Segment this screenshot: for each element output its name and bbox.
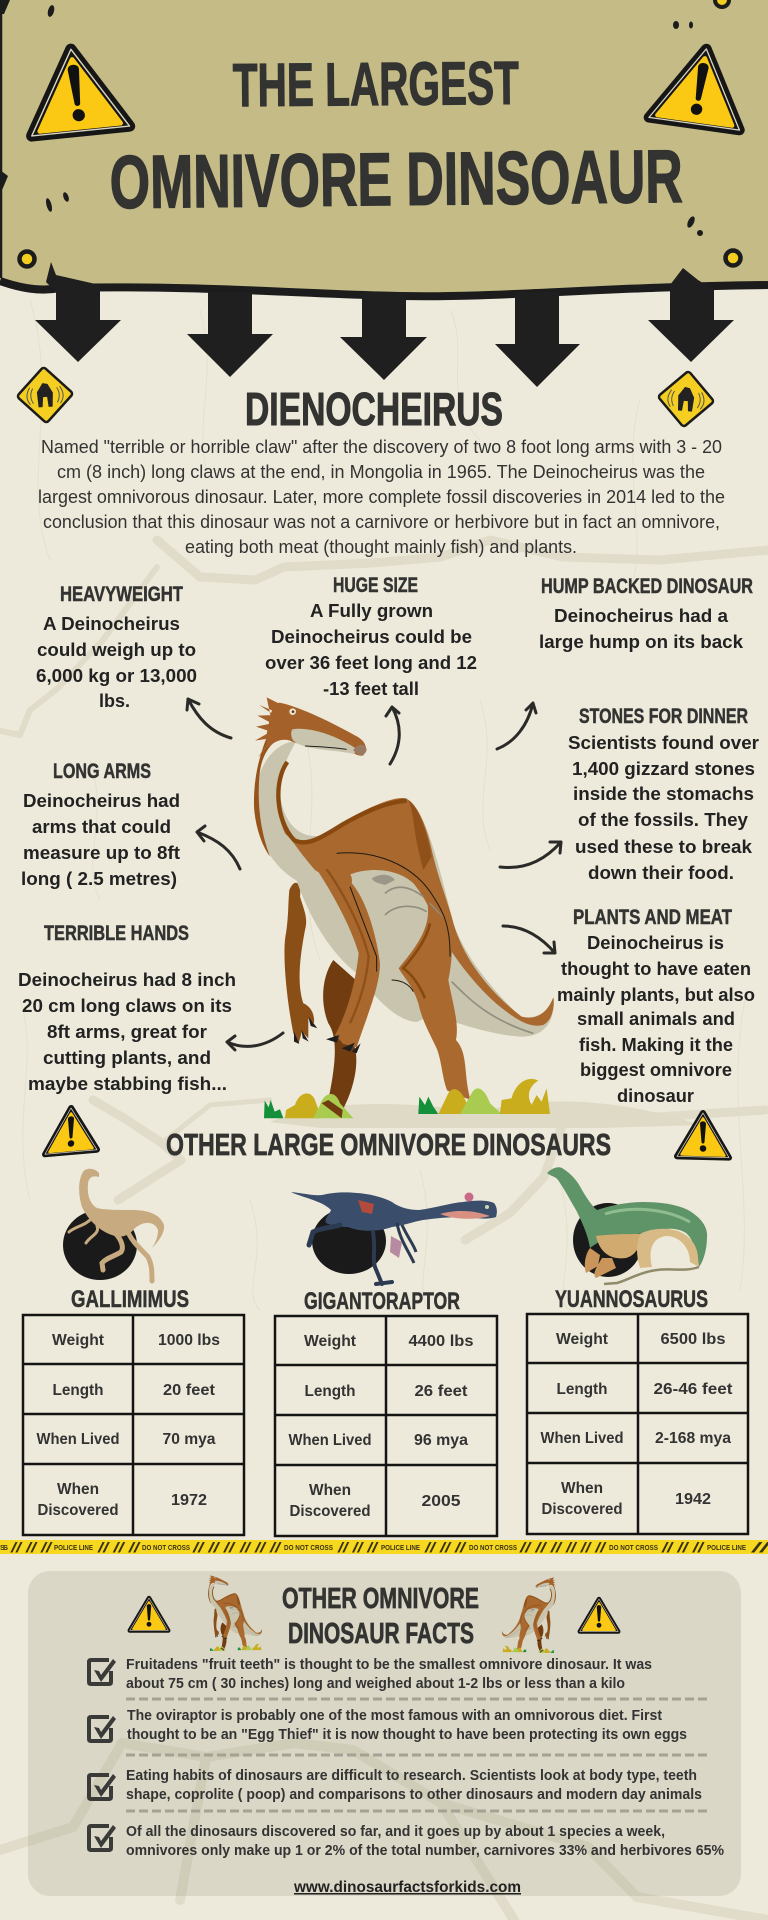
fact: heavyweight <box>36 583 197 711</box>
fact 1: about 75 cm ( 30 inches) long and weighed about 1-2 lbs or less than a kilo <box>126 1676 625 1692</box>
fact 2 <box>89 1708 687 1743</box>
table: Yuannosaurus: 1942 <box>675 1491 711 1508</box>
heading: other large omnivore dinosaurs: OTHER LARGE OMNIVORE DINOSAURS <box>166 1127 611 1162</box>
table: Gallimimus: 20 feet <box>163 1382 216 1399</box>
table: Gallimimus: When <box>57 1481 99 1498</box>
table: Yuannosaurus: 26-46 feet <box>654 1381 733 1398</box>
illustration: Gigantoraptor <box>291 1192 497 1284</box>
caution tape: POLICE LINE <box>381 1543 420 1552</box>
icon: warning triangle section right <box>677 1112 729 1158</box>
fact: terrible hands: 8ft arms, great for <box>47 1022 207 1042</box>
icon: warning triangle facts right <box>580 1599 618 1632</box>
table: Yuannosaurus: 2-168 mya <box>655 1430 731 1447</box>
table: Gigantoraptor: 26 feet <box>414 1383 468 1400</box>
table: Gallimimus: 70 mya <box>162 1431 216 1448</box>
fact: plants and meat: fish. Making it the <box>579 1035 733 1055</box>
caution tape: POLICE LINE <box>54 1543 93 1552</box>
panel: other omnivore dinosaur facts <box>28 1571 741 1896</box>
fact: stones for dinner: used these to break <box>575 837 753 857</box>
icon: warning triangle right <box>649 43 752 130</box>
fact 3: shape, coprolite ( poop) and comparisons to other dinosaurs and modern day animals <box>126 1787 702 1803</box>
caution tape: // // // <box>192 1539 237 1555</box>
illustration: Yuannosaurus <box>547 1167 707 1284</box>
table: Gigantoraptor: 4400 lbs <box>408 1333 474 1350</box>
caution tape: DO NOT CROSS <box>284 1543 333 1552</box>
fact: heavyweight: could weigh up to <box>37 640 196 660</box>
fact: terrible hands: cutting plants, and <box>43 1048 211 1068</box>
caution tape: // // // <box>10 1539 54 1555</box>
table: Gigantoraptor: 2005 <box>422 1493 461 1510</box>
fact: heavyweight: A Deinocheirus <box>43 614 180 634</box>
fact: plants and meat: small animals and <box>577 1009 735 1029</box>
illustration: Gallimimus <box>63 1169 164 1281</box>
caution tape: DO NOT CROSS <box>142 1543 190 1552</box>
caution tape: // // // <box>239 1539 283 1555</box>
table: Gallimimus: Length <box>52 1382 104 1399</box>
fact: heavyweight: HEAVYWEIGHT <box>60 583 183 606</box>
intro paragraph: Named "terrible or horrible claw" after the discovery of two 8 foot long arms with 3 - 20 <box>41 436 722 457</box>
intro paragraph: eating both meat (thought mainly fish) and plants. <box>185 536 577 557</box>
heading: other omnivore dinosaur facts: DINOSAUR FACTS <box>288 1618 474 1650</box>
fact 4: Of all the dinosaurs discovered so far, and it goes up by about 1 species a week, <box>126 1824 665 1840</box>
caution tape: SS <box>0 1543 8 1552</box>
fact: plants and meat: Deinocheirus is <box>587 933 724 953</box>
fact 2: The oviraptor is probably one of the most famous with an omnivorous diet. First <box>127 1708 662 1724</box>
caution tape: // // // <box>97 1539 142 1555</box>
fact 4 <box>89 1824 724 1859</box>
website url: www.dinosaurfactsforkids.com <box>293 1879 521 1896</box>
icon: warning triangle section left <box>45 1106 97 1154</box>
table: Yuannosaurus: 6500 lbs <box>660 1331 726 1348</box>
fact: huge size: Deinocheirus could be <box>271 627 472 647</box>
illustration: Deinocheirus <box>254 697 554 1118</box>
heading: Dienocheirus: DIENOCHEIRUS <box>245 383 503 435</box>
caution tape: // // // <box>661 1539 706 1555</box>
fact: terrible hands: Deinocheirus had 8 inch <box>18 970 236 990</box>
name: Yuannosaurus: YUANNOSAURUS <box>555 1286 708 1313</box>
table: Gigantoraptor: Discovered <box>290 1503 370 1520</box>
fact: huge size: -13 feet tall <box>323 679 419 699</box>
table: Gigantoraptor <box>275 1316 497 1536</box>
fact: terrible hands: TERRIBLE HANDS <box>44 922 189 945</box>
name: Gallimimus: GALLIMIMUS <box>71 1286 189 1313</box>
fact: heavyweight: lbs. <box>99 691 130 711</box>
fact: heavyweight: 6,000 kg or 13,000 <box>36 666 197 686</box>
intro paragraph: cm (8 inch) long claws at the end, in Mongolia in 1965. The Deinocheirus was the <box>57 461 705 482</box>
fact: hump backed dinosaur <box>539 575 753 652</box>
table: Yuannosaurus: Length <box>556 1381 608 1398</box>
caution tape: // // // <box>565 1539 608 1555</box>
table: Gallimimus: Discovered <box>38 1502 118 1519</box>
fact: terrible hands <box>18 922 236 1094</box>
caution tape: // // // <box>519 1539 564 1555</box>
name: Gigantoraptor: GIGANTORAPTOR <box>304 1288 460 1315</box>
caution tape: POLICE LINE <box>707 1543 746 1552</box>
caution tape: // // // <box>337 1539 380 1555</box>
table: Gigantoraptor: 96 mya <box>414 1432 468 1449</box>
fact: huge size: HUGE SIZE <box>333 574 418 597</box>
fact: terrible hands: maybe stabbing fish... <box>28 1074 227 1094</box>
table: Gallimimus: When Lived <box>36 1431 120 1448</box>
intro paragraph <box>38 436 725 557</box>
fact: hump backed dinosaur: large hump on its back <box>539 632 744 652</box>
fact 3 <box>89 1768 702 1803</box>
fact: terrible hands: 20 cm long claws on its <box>22 996 232 1016</box>
intro paragraph: conclusion that this dinosaur was not a carnivore or herbivore but in fact an omnivore, <box>43 511 720 532</box>
fact: long arms: Deinocheirus had <box>23 791 180 811</box>
title: THE LARGEST <box>233 49 519 119</box>
icon: road sign right <box>655 368 717 430</box>
fact: stones for dinner: down their food. <box>588 863 734 883</box>
fact: huge size: over 36 feet long and 12 <box>265 653 477 673</box>
fact: hump backed dinosaur: Deinocheirus had a <box>554 606 729 626</box>
icon: road sign left <box>15 365 75 425</box>
caution tape <box>0 1539 768 1555</box>
table: Yuannosaurus: Discovered <box>542 1501 622 1518</box>
fact: huge size <box>265 574 477 699</box>
heading: other omnivore dinosaur facts: OTHER OMNIVORE <box>282 1583 479 1615</box>
heading: other omnivore dinosaur facts <box>282 1583 479 1650</box>
fact 1: Fruitadens "fruit teeth" is thought to be the smallest omnivore dinosaur. It was <box>126 1657 652 1673</box>
fact 4: omnivores only make up 1 or 2% of the total number, carnivores 33% and herbivores 65% <box>126 1843 724 1859</box>
table: Gallimimus: 1972 <box>171 1492 207 1509</box>
table: Yuannosaurus: When <box>561 1480 603 1497</box>
fact: stones for dinner: of the fossils. They <box>578 810 748 830</box>
intro paragraph: largest omnivorous dinosaur. Later, more complete fossil discoveries in 2014 led to the <box>38 486 725 507</box>
fact: stones for dinner: Scientists found over <box>568 733 759 753</box>
icon: warning triangle left <box>22 44 130 136</box>
title <box>109 49 683 224</box>
table: Yuannosaurus <box>527 1314 748 1534</box>
fact: plants and meat <box>557 906 755 1106</box>
caution tape: // <box>750 1539 768 1555</box>
arrows pointing down <box>35 262 734 387</box>
table: Gallimimus <box>23 1315 244 1535</box>
fact: stones for dinner: inside the stomachs <box>573 784 754 804</box>
table: Yuannosaurus: Weight <box>556 1331 609 1348</box>
fact: huge size: A Fully grown <box>310 601 433 621</box>
fact: long arms: measure up to 8ft <box>23 843 180 863</box>
caution tape: // // // <box>424 1539 468 1555</box>
table: Gigantoraptor: When Lived <box>288 1432 372 1449</box>
fact: stones for dinner: 1,400 gizzard stones <box>572 759 755 779</box>
fact: long arms <box>21 760 180 889</box>
fact: long arms: long ( 2.5 metres) <box>21 869 177 889</box>
header banner <box>0 0 768 296</box>
illustration: small dinosaur right <box>502 1577 556 1653</box>
fact: plants and meat: dinosaur <box>617 1086 694 1106</box>
fact 2: thought to be an "Egg Thief" it is now thought to have been protecting its own eggs <box>127 1727 687 1743</box>
table: Gallimimus: 1000 lbs <box>158 1332 220 1349</box>
table: Gallimimus: Weight <box>52 1332 105 1349</box>
fact: stones for dinner <box>568 705 759 883</box>
fact: plants and meat: thought to have eaten <box>561 959 751 979</box>
table: Gigantoraptor: Length <box>304 1383 356 1400</box>
fact 3: Eating habits of dinosaurs are difficult to research. Scientists look at body type, teeth <box>126 1768 697 1784</box>
fact: long arms: arms that could <box>32 817 171 837</box>
icon: warning triangle facts left <box>130 1598 168 1631</box>
caution tape: DO NOT CROSS <box>469 1543 517 1552</box>
fact 1 <box>89 1657 652 1692</box>
illustration: small dinosaur left <box>208 1575 262 1651</box>
fact: plants and meat: PLANTS AND MEAT <box>573 906 732 929</box>
callout arrows <box>187 699 561 1050</box>
table: Gigantoraptor: When <box>309 1482 351 1499</box>
fact: long arms: LONG ARMS <box>53 760 151 783</box>
caution tape: DO NOT CROSS <box>609 1543 658 1552</box>
table: Gigantoraptor: Weight <box>304 1333 357 1350</box>
fact: plants and meat: biggest omnivore <box>580 1060 732 1080</box>
fact: plants and meat: mainly plants, but also <box>557 985 755 1005</box>
table: Yuannosaurus: When Lived <box>540 1430 624 1447</box>
